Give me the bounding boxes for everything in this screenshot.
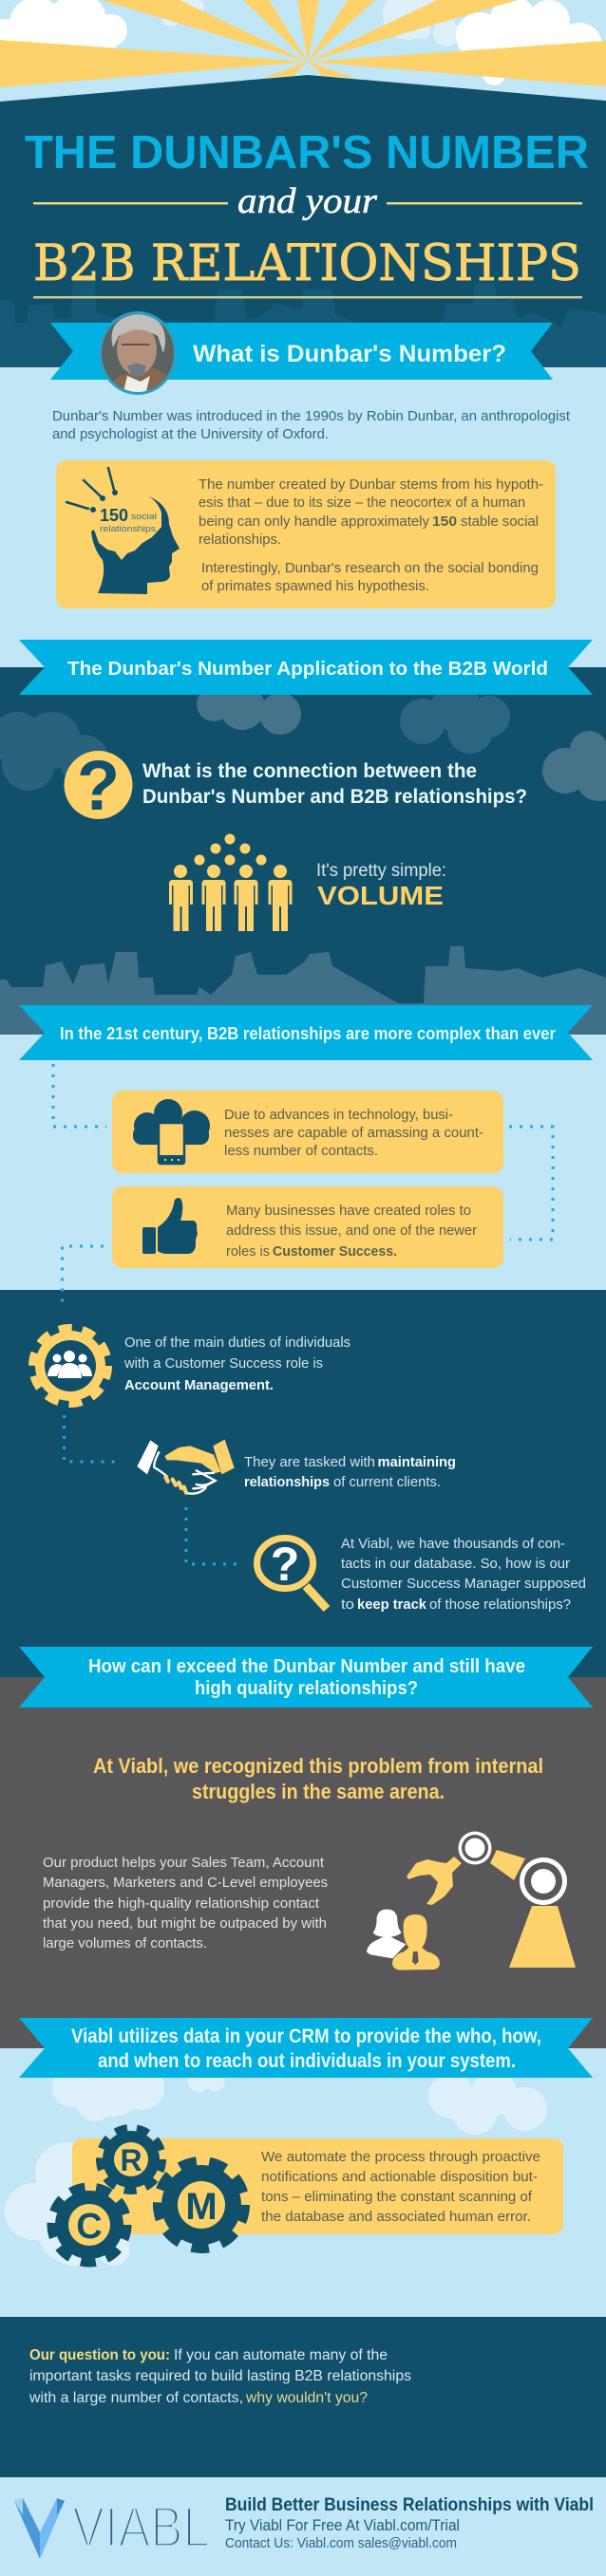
card text: nesses are capable of amassing a count- xyxy=(224,1125,483,1141)
panel: application section background xyxy=(0,667,606,1035)
banner: viabl utilizes data: Viabl utilizes data in your CRM to provide the who, how, xyxy=(71,2025,541,2047)
connection question: Dunbar's Number and B2B relationships? xyxy=(142,786,527,808)
banner: how can I exceed xyxy=(19,1647,593,1708)
icon: head with 150 social relationships xyxy=(66,468,180,594)
callout text: Interestingly, Dunbar's research on the social bonding xyxy=(201,560,539,576)
banner: viabl utilizes data xyxy=(19,2018,593,2078)
card text: Due to advances in technology, busi- xyxy=(224,1107,453,1123)
connection question xyxy=(142,760,527,808)
callout text: esis that – due to its size – the neocortex of a human xyxy=(199,495,525,511)
relationships text: of current clients. xyxy=(333,1474,441,1490)
viabl question text: of those relationships? xyxy=(429,1596,571,1613)
panel: closing question xyxy=(0,2317,606,2477)
viabl question text: Customer Success Manager supposed xyxy=(341,1576,586,1592)
product paragraph xyxy=(43,1855,328,1951)
connection question: What is the connection between the xyxy=(142,760,477,782)
volume text: VOLUME xyxy=(317,881,444,910)
icon: gear with team xyxy=(32,1328,108,1404)
yellow heading: struggles in the same arena. xyxy=(192,1780,445,1803)
banner: application to the B2B world xyxy=(19,640,593,695)
account management text: Account Management. xyxy=(124,1377,274,1393)
intro text: and psychologist at the University of Oxford. xyxy=(52,426,329,442)
product paragraph: large volumes of contacts. xyxy=(43,1935,207,1951)
icon: business people xyxy=(367,1910,440,1970)
icon: head with 150 social relationships: 150 xyxy=(100,506,128,525)
icon: gear C xyxy=(51,2187,127,2263)
callout text: stable social xyxy=(461,513,539,530)
product paragraph: Managers, Marketers and C-Level employees xyxy=(43,1875,328,1891)
logo: viabl: VIABL xyxy=(72,2495,210,2559)
panel: automate section background xyxy=(0,2048,606,2317)
icon: thumbs up xyxy=(142,1198,198,1254)
banner: how can I exceed: How can I exceed the Dunbar Number and still have xyxy=(88,1656,525,1677)
logo: viabl xyxy=(14,2495,210,2559)
yellow heading: At Viabl, we recognized this problem from internal xyxy=(93,1754,543,1778)
card text: roles is xyxy=(226,1243,270,1260)
account management text xyxy=(123,1335,350,1393)
viabl question text xyxy=(341,1536,586,1613)
icon: robot arm xyxy=(407,1832,576,1968)
panel: technology card xyxy=(112,1091,503,1173)
callout text: relationships. xyxy=(199,532,281,548)
title divider: and your: and your xyxy=(237,181,377,221)
icon: gear M: M xyxy=(185,2186,218,2228)
card text xyxy=(224,1107,483,1159)
header clouds xyxy=(0,0,602,85)
intro text: Dunbar's Number was introduced in the 1990s by Robin Dunbar, an anthropologist xyxy=(52,408,571,424)
volume text xyxy=(316,861,446,910)
callout text: being can only handle approximately xyxy=(199,513,429,530)
panel: closing question: important tasks required to build lasting B2B relationships xyxy=(29,2368,411,2384)
panel: closing question: Our question to you: xyxy=(29,2347,170,2363)
card text: tons – eliminating the constant scanning of xyxy=(261,2189,533,2205)
callout text: 150 xyxy=(432,513,457,530)
intro text xyxy=(52,408,571,442)
product paragraph: provide the high-quality relationship contact xyxy=(43,1895,320,1912)
callout text: of primates spawned his hypothesis. xyxy=(201,578,429,594)
sun rays xyxy=(0,0,606,87)
product paragraph: Our product helps your Sales Team, Account xyxy=(43,1855,325,1871)
dotted connector lines xyxy=(53,1064,553,1564)
icon: head with 150 social relationships: relationships xyxy=(100,524,156,534)
icon: cloud and phone xyxy=(133,1099,210,1164)
panel: automation card xyxy=(72,2138,563,2234)
relationships text: relationships xyxy=(244,1474,330,1490)
dark clouds xyxy=(0,682,606,801)
footer call to action xyxy=(225,2495,594,2551)
icon: question mark: ? xyxy=(77,746,120,825)
product paragraph: that you need, but might be outpaced by with xyxy=(43,1915,327,1932)
icon: handshake xyxy=(137,1440,235,1494)
footer call to action: Contact Us: Viabl.com sales@viabl.com xyxy=(225,2535,457,2551)
banner: application to the B2B world: The Dunbar's Number Application to the B2B World xyxy=(67,659,548,680)
panel: title background xyxy=(0,75,606,367)
panel: customer section background xyxy=(0,1290,606,1677)
card text: We automate the process through proactive xyxy=(261,2149,540,2165)
card text: less number of contacts. xyxy=(224,1143,378,1159)
banner: viabl utilizes data: and when to reach out individuals in your system. xyxy=(98,2050,516,2072)
title underline xyxy=(33,296,582,298)
relationships text xyxy=(244,1454,456,1490)
card text: Many businesses have created roles to xyxy=(226,1203,471,1219)
icon: question mark xyxy=(65,746,133,825)
portrait of Robin Dunbar xyxy=(99,311,177,395)
card text: the database and associated human error. xyxy=(261,2209,531,2225)
callout text: The number created by Dunbar stems from his hypoth- xyxy=(199,476,543,493)
panel: hypothesis callout xyxy=(56,460,556,608)
card text: address this issue, and one of the newer xyxy=(226,1223,477,1239)
icon: gear R xyxy=(100,2128,162,2191)
card text xyxy=(261,2149,540,2225)
icon: people with dots xyxy=(169,833,293,931)
banner: 21st century: In the 21st century, B2B relationships are more complex than ever xyxy=(60,1023,556,1043)
banner: what is dunbar's number xyxy=(50,323,553,380)
banner: what is dunbar's number: What is Dunbar's Number? xyxy=(193,341,506,367)
icon: gear R: R xyxy=(120,2143,142,2177)
card text xyxy=(226,1203,477,1260)
viabl question text: tacts in our database. So, how is our xyxy=(341,1556,570,1572)
relationships text: maintaining xyxy=(378,1454,456,1470)
faint skyline behind title xyxy=(0,281,606,367)
banner: how can I exceed: high quality relationships? xyxy=(195,1678,418,1699)
footer call to action: Try Viabl For Free At Viabl.com/Trial xyxy=(225,2516,460,2534)
account management text: One of the main duties of individuals xyxy=(124,1335,350,1351)
icon: magnifying glass: ? xyxy=(271,1538,299,1591)
relationships text: They are tasked with xyxy=(244,1454,375,1470)
panel: grey section background xyxy=(0,1677,606,2048)
panel: customer success card xyxy=(112,1186,503,1268)
viabl question text: keep track xyxy=(357,1596,427,1613)
panel: closing question: with a large number of contacts, xyxy=(28,2390,243,2406)
icon: gear M xyxy=(158,2161,245,2249)
panel: closing question: If you can automate many of the xyxy=(174,2347,388,2363)
panel: closing question: why wouldn't you? xyxy=(245,2390,368,2406)
viabl question text: to xyxy=(341,1596,354,1613)
title: the dunbar's number: THE DUNBAR'S NUMBER xyxy=(25,127,589,178)
account management text: with a Customer Success role is xyxy=(123,1355,323,1372)
viabl question text: At Viabl, we have thousands of con- xyxy=(341,1536,565,1552)
card text: Customer Success. xyxy=(273,1243,397,1260)
yellow heading xyxy=(93,1754,543,1803)
volume text: It's pretty simple: xyxy=(316,861,446,881)
city skyline xyxy=(0,946,606,1035)
title: b2b relationships: B2B RELATIONSHIPS xyxy=(33,235,581,292)
icon: magnifying glass xyxy=(256,1538,327,1609)
banner: 21st century xyxy=(19,1005,593,1060)
card text: notifications and actionable disposition but- xyxy=(261,2169,538,2185)
icon: head with 150 social relationships: social xyxy=(131,512,157,522)
callout text xyxy=(199,476,543,594)
pale clouds xyxy=(5,2060,547,2266)
icon: gear C: C xyxy=(76,2207,103,2247)
